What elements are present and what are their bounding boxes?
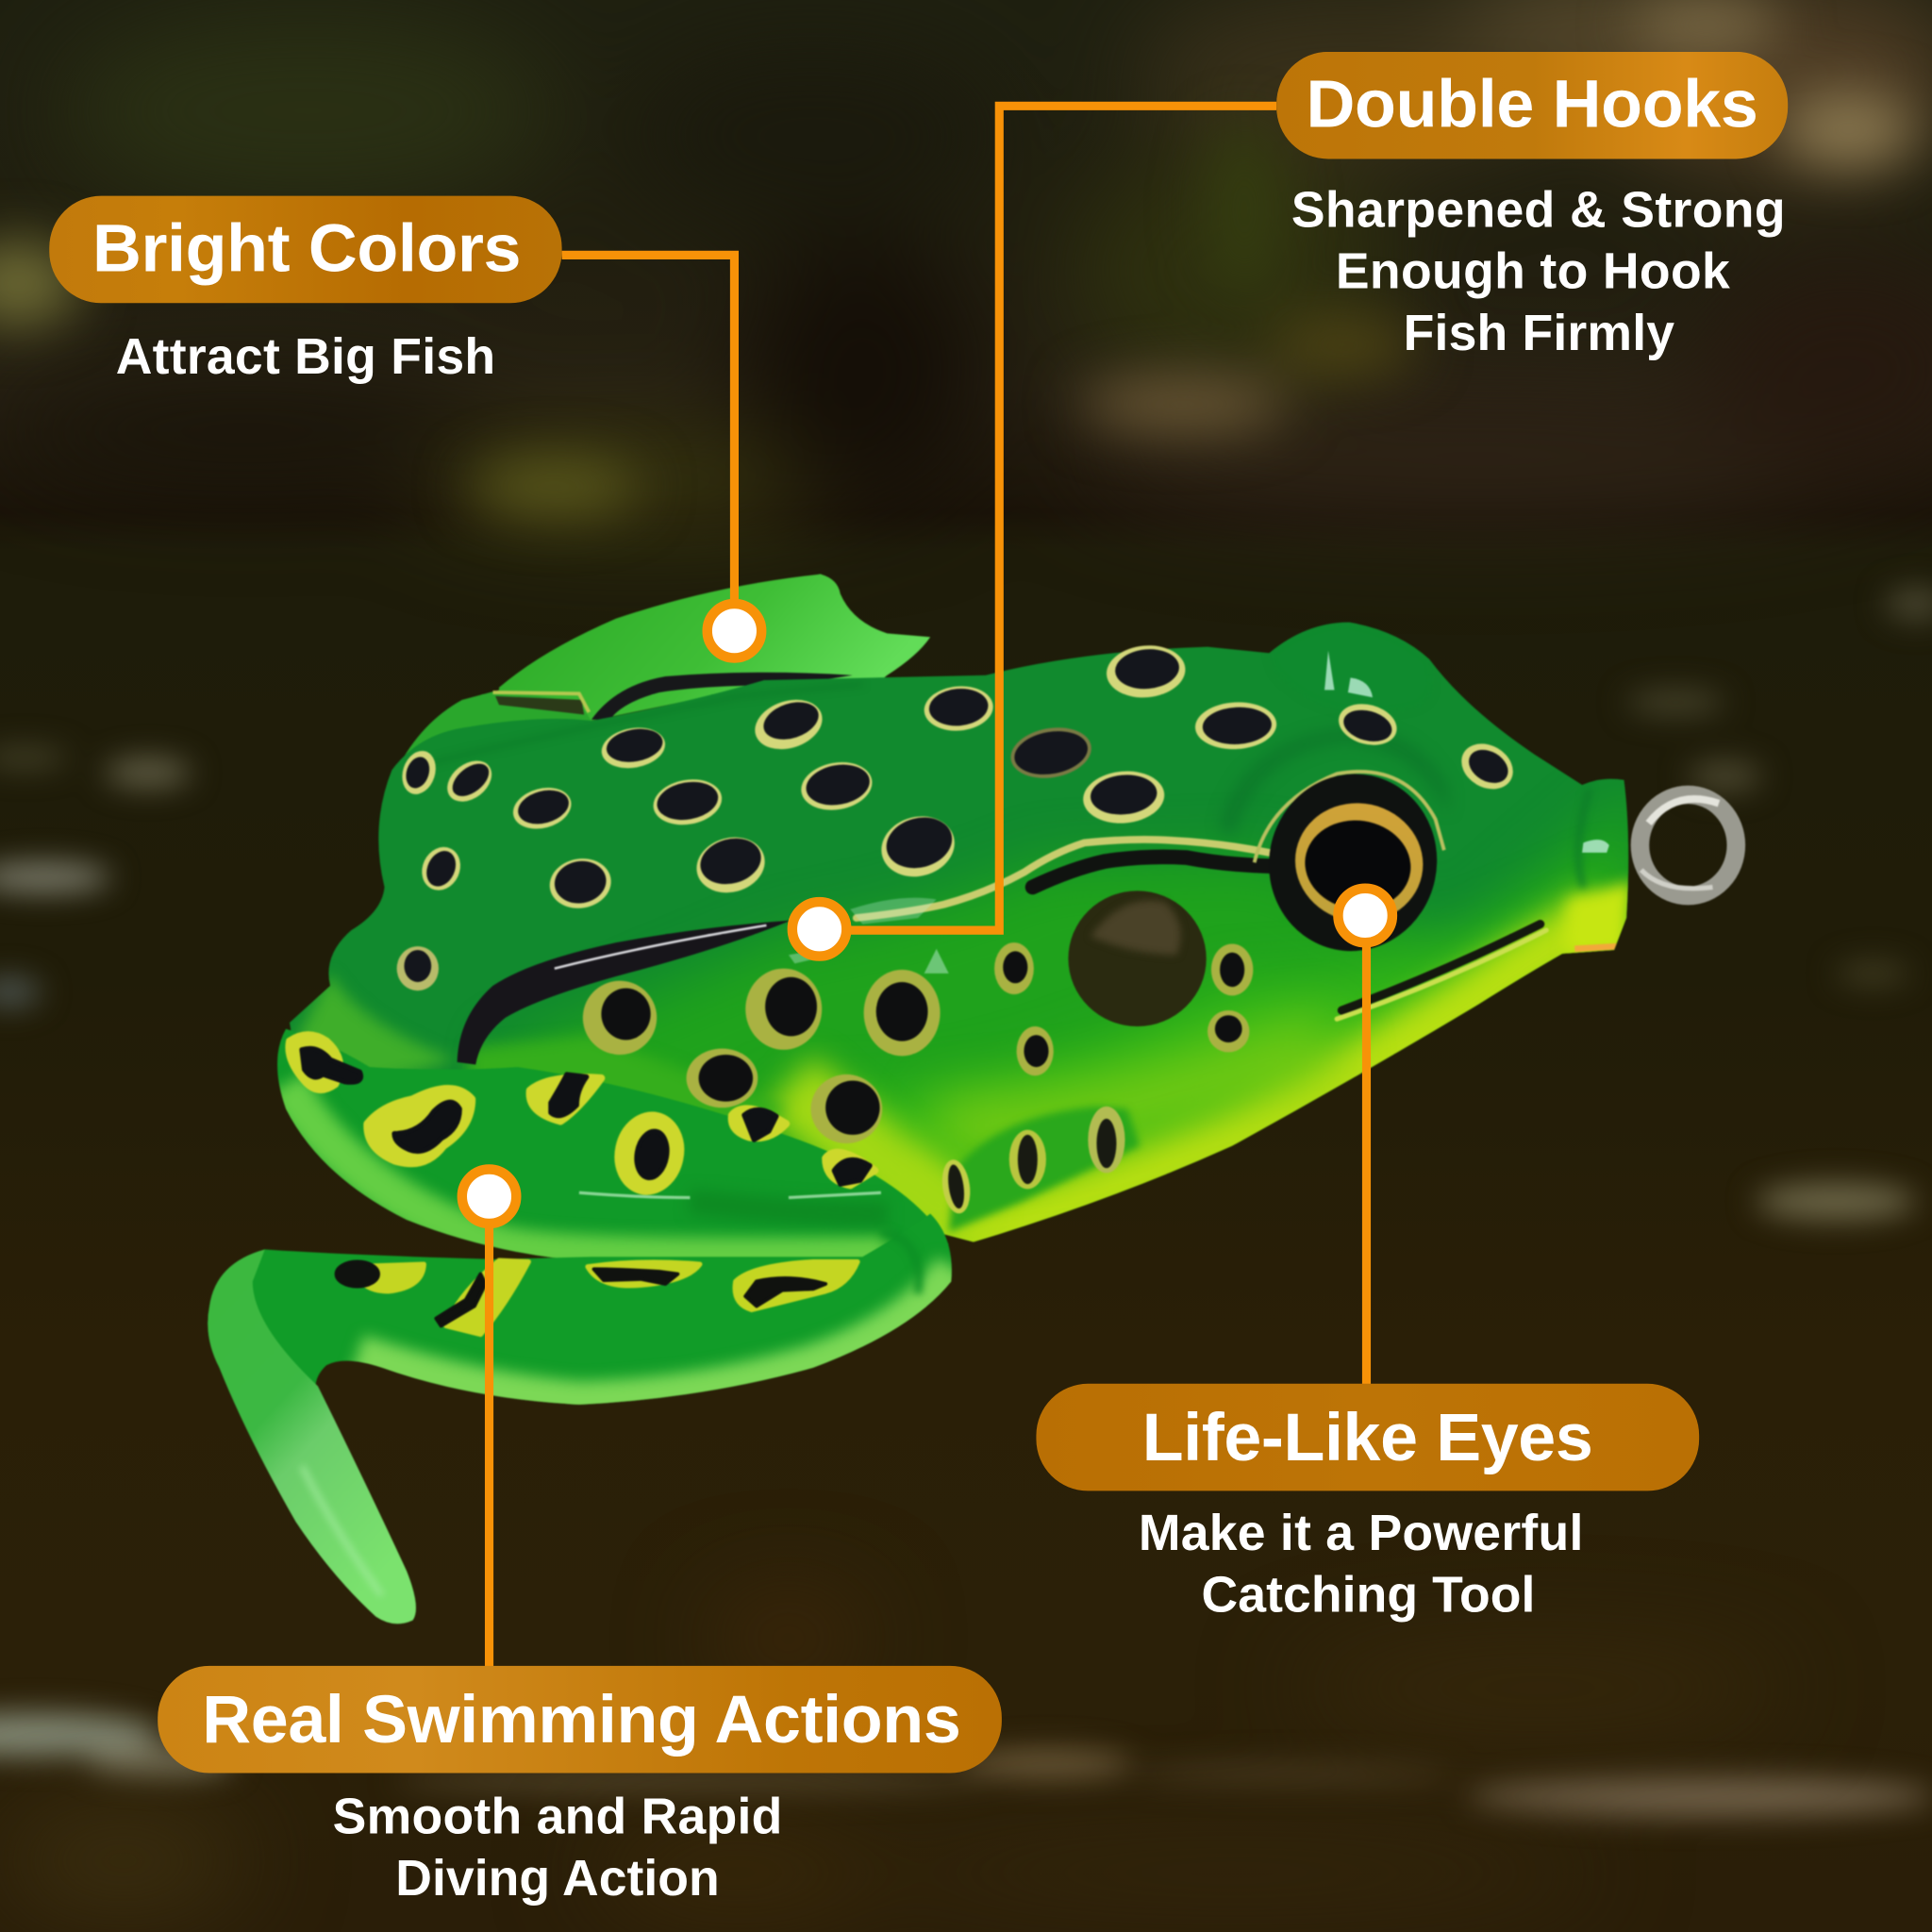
tympanum xyxy=(1068,891,1207,1026)
description: Enough to Hook xyxy=(1336,244,1730,300)
heading: Bright Colors xyxy=(92,210,521,286)
marker dot xyxy=(462,1170,516,1224)
description: Diving Action xyxy=(395,1851,720,1907)
connector line xyxy=(850,106,1276,930)
callout: Bright Colors xyxy=(49,196,761,658)
callout: Real Swimming Actions xyxy=(158,1170,1002,1907)
eye xyxy=(1253,758,1454,967)
callout: Double Hooks xyxy=(792,52,1788,957)
metal eyelet ring xyxy=(1640,794,1736,896)
label pill xyxy=(49,196,562,303)
description: Sharpened & Strong xyxy=(1291,182,1786,238)
marker dot xyxy=(708,604,761,658)
label pill xyxy=(1276,52,1788,158)
connector line xyxy=(486,1226,492,1670)
description: Catching Tool xyxy=(1201,1567,1535,1623)
highlights xyxy=(789,651,1609,974)
rear thigh xyxy=(277,1029,949,1261)
heading: Real Swimming Actions xyxy=(202,1682,961,1757)
thigh spots xyxy=(289,1035,874,1197)
frog lure xyxy=(208,575,1736,1624)
marker dot xyxy=(1338,889,1392,942)
rear haunch xyxy=(383,690,591,857)
frog body xyxy=(290,623,1628,1242)
description: Fish Firmly xyxy=(1404,306,1674,361)
rear shin and foot xyxy=(208,1214,955,1624)
belly bumps xyxy=(939,1107,1140,1232)
heading: Double Hooks xyxy=(1306,67,1758,142)
lateral stripe xyxy=(857,840,1546,1019)
heading: Life-Like Eyes xyxy=(1142,1400,1593,1475)
main hook xyxy=(458,921,791,1064)
upper hook point xyxy=(591,673,853,720)
connector line xyxy=(1363,942,1370,1386)
label pill xyxy=(158,1666,1002,1774)
description: Smooth and Rapid xyxy=(333,1790,782,1845)
back spots xyxy=(397,642,1521,991)
description: Make it a Powerful xyxy=(1139,1506,1583,1561)
shin spots xyxy=(354,1260,858,1335)
label pill xyxy=(1036,1384,1699,1491)
callout: Life-Like Eyes xyxy=(1036,889,1699,1623)
body shading xyxy=(295,623,1639,1257)
marker dot xyxy=(792,902,846,957)
connector line xyxy=(562,255,734,604)
description: Attract Big Fish xyxy=(116,329,495,385)
rear foot fin xyxy=(499,575,930,721)
side spots xyxy=(578,942,1253,1143)
